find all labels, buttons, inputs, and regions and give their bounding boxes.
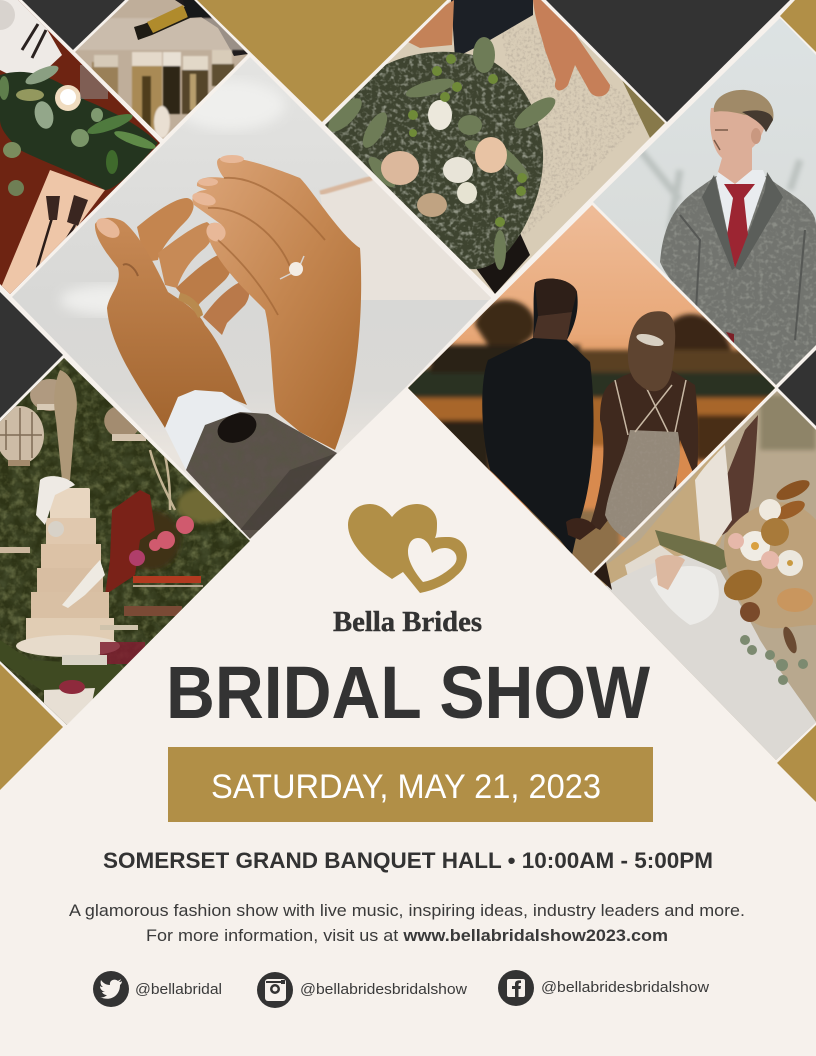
jacket <box>660 176 816 385</box>
bride hair <box>628 311 675 391</box>
brand name: Bella Brides <box>333 607 482 638</box>
wedding band <box>178 293 203 318</box>
description: For more information, visit us at www.bellabridalshow2023.com <box>146 926 668 945</box>
moss base <box>0 640 122 698</box>
hair <box>714 90 773 132</box>
leaves <box>323 37 560 270</box>
groom back <box>482 279 594 555</box>
social: instagram <box>257 972 467 1008</box>
photo: champagne glasses <box>70 0 255 140</box>
date banner: SATURDAY, MAY 21, 2023 <box>211 768 601 806</box>
reddish foliage <box>105 490 155 595</box>
ring <box>280 256 304 279</box>
social: twitter <box>93 971 222 1007</box>
dessert stands <box>133 576 201 583</box>
sleeve <box>186 412 337 539</box>
dress <box>600 554 816 770</box>
veil and sleeve <box>594 444 730 586</box>
orchids <box>129 516 194 566</box>
logo: two hearts <box>348 504 467 593</box>
bride back <box>590 370 698 531</box>
photo: bride with bouquet <box>590 385 816 770</box>
social: twitter: @bellabridal <box>135 981 222 998</box>
neck and head <box>710 105 767 184</box>
description: A glamorous fashion show with live music, inspiring ideas, industry leaders and more. <box>69 901 745 920</box>
title: BRIDAL SHOW <box>166 651 650 734</box>
cake tiers <box>16 476 120 657</box>
hanging lanterns <box>0 370 175 510</box>
gold diamond bottom right <box>777 725 816 802</box>
photo: hands with ring <box>0 50 500 550</box>
right hand <box>192 158 361 450</box>
dark diamond left <box>0 292 63 418</box>
dark diamond right <box>778 350 816 426</box>
berries <box>408 54 527 227</box>
date banner <box>168 747 653 822</box>
venue and time: SOMERSET GRAND BANQUET HALL • 10:00AM - 5:00PM <box>103 848 713 873</box>
dark diamond top left <box>22 0 125 50</box>
left hand <box>95 218 247 428</box>
gold corner top right <box>780 0 816 52</box>
dark diamond top right <box>546 0 790 122</box>
gold diamond top centre <box>197 0 447 122</box>
left hand back fingers <box>137 198 194 262</box>
description <box>69 901 745 945</box>
cuff <box>165 390 252 470</box>
social: facebook <box>498 970 709 1006</box>
social: facebook: @bellabridesbridalshow <box>541 979 709 996</box>
flowers <box>381 100 507 217</box>
photo: groom in suit <box>590 0 816 400</box>
finger nails <box>93 155 244 245</box>
social: instagram: @bellabridesbridalshow <box>300 981 467 998</box>
gold diamond bottom left <box>0 664 63 790</box>
cream panel <box>0 389 816 1056</box>
photo: table setting <box>0 0 170 300</box>
bouquet <box>655 476 816 655</box>
photo: bouquet and sheet music <box>320 0 670 300</box>
photo: couple at sunset <box>400 200 780 590</box>
photo: wedding cake <box>0 355 255 730</box>
